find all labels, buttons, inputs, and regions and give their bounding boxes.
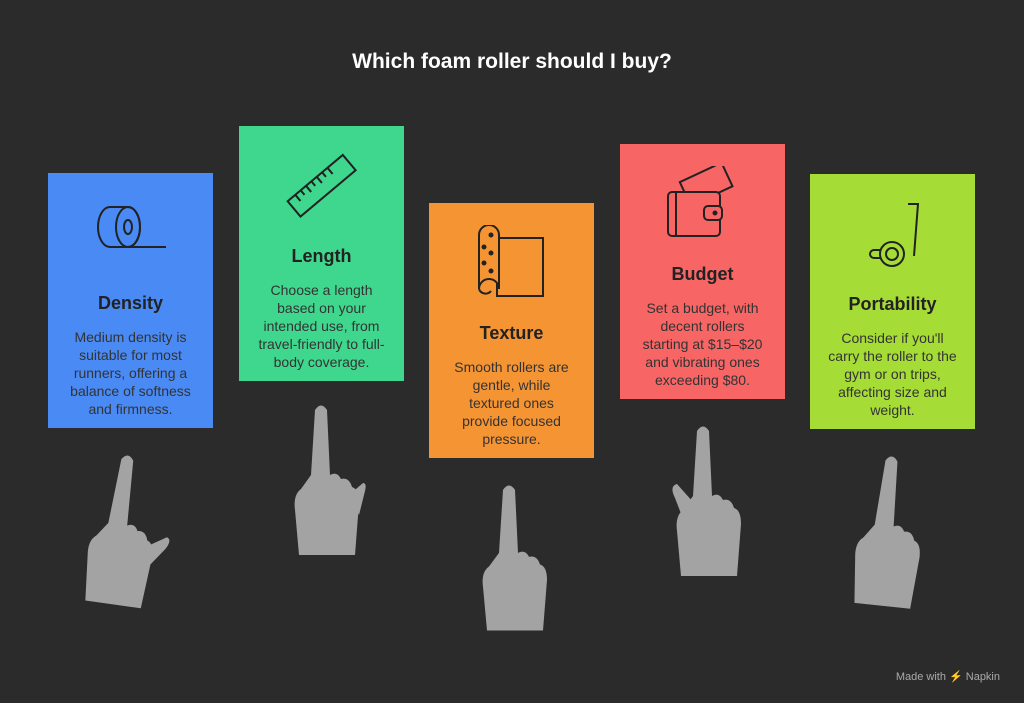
hand: budget xyxy=(672,426,741,576)
icon: ruler xyxy=(286,154,357,218)
text: carry the roller to the xyxy=(828,348,957,364)
text: body coverage. xyxy=(274,354,369,370)
panel: density xyxy=(48,173,213,428)
hand: portability xyxy=(850,454,930,609)
text: Set a budget, with xyxy=(646,300,759,316)
text xyxy=(643,300,762,388)
heading: Length xyxy=(292,246,352,266)
hand: density xyxy=(81,452,180,611)
heading: Density xyxy=(98,293,163,313)
panel: texture xyxy=(429,203,594,458)
icon: roller with handle xyxy=(869,203,920,267)
panel: portability xyxy=(810,174,975,429)
text: affecting size and xyxy=(838,384,947,400)
footer credit: Made with ⚡ Napkin xyxy=(896,671,1000,683)
panel: length xyxy=(239,126,404,381)
text: Choose a length xyxy=(271,282,372,298)
text: starting at $15–$20 xyxy=(643,336,762,352)
heading: Portability xyxy=(848,294,936,314)
text: gentle, while xyxy=(473,377,550,393)
text: and vibrating ones xyxy=(645,354,760,370)
text: suitable for most xyxy=(79,347,182,363)
text: intended use, from xyxy=(264,318,379,334)
text: Medium density is xyxy=(74,329,187,345)
text: decent rollers xyxy=(660,318,745,334)
icon: wallet xyxy=(667,166,734,237)
text: gym or on trips, xyxy=(844,366,941,382)
text xyxy=(828,330,957,418)
text: based on your xyxy=(277,300,366,316)
text: textured ones xyxy=(469,395,554,411)
text: Consider if you'll xyxy=(841,330,944,346)
text: pressure. xyxy=(482,431,541,447)
text: exceeding $80. xyxy=(655,372,750,388)
heading: Budget xyxy=(672,264,734,284)
text: balance of softness xyxy=(70,383,191,399)
text: weight. xyxy=(870,402,915,418)
icon: roller xyxy=(97,206,166,248)
text: provide focused xyxy=(462,413,561,429)
icon: textured mat xyxy=(478,225,544,297)
panel: budget xyxy=(620,144,785,399)
text xyxy=(258,282,385,370)
title: Which foam roller should I buy? xyxy=(352,50,672,73)
heading: Texture xyxy=(480,323,543,343)
text: Smooth rollers are xyxy=(454,359,569,375)
hand: length xyxy=(295,406,366,555)
text xyxy=(454,359,569,447)
text: and firmness. xyxy=(88,401,173,417)
hand: texture xyxy=(483,485,547,630)
text xyxy=(70,329,191,417)
text: travel-friendly to full- xyxy=(258,336,385,352)
text: runners, offering a xyxy=(74,365,187,381)
